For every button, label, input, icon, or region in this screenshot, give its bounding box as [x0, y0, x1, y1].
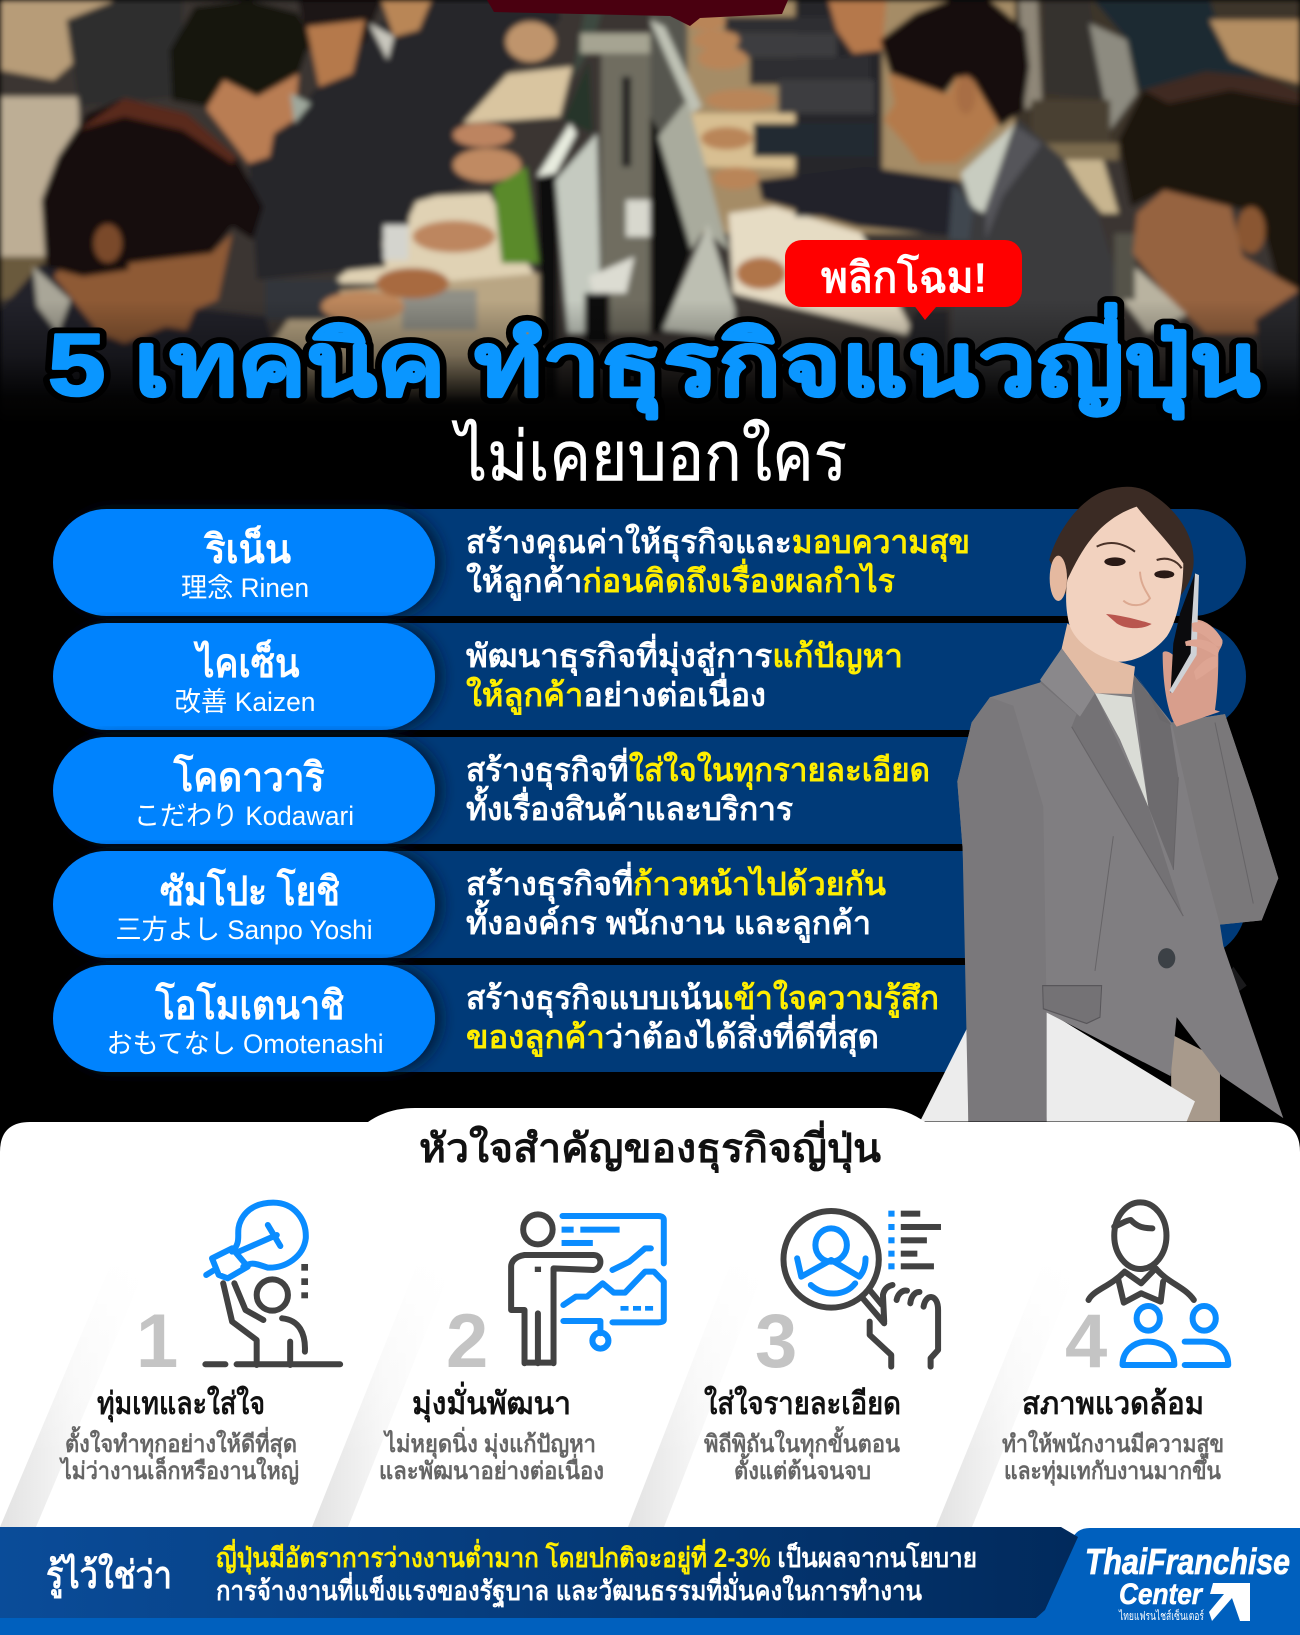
item 3: 3 [755, 1299, 797, 1384]
panel: Omotenashi row: สร้างธุรกิจแบบเน้นเข้าใจความรู้สึก [466, 979, 939, 1019]
item 4 [1002, 1202, 1228, 1487]
icon: manager and team [1089, 1202, 1228, 1365]
panel: Kaizen row: พัฒนาธุรกิจที่มุ่งสู่การ แก้ปัญหา [466, 633, 903, 677]
item 3: พิถีพิถันในทุกขั้นตอน [704, 1425, 901, 1460]
item 2: 2 [446, 1299, 488, 1384]
item 3: ใส่ใจรายละเอียด [704, 1385, 901, 1421]
icon: person holding light bulb [205, 1203, 340, 1365]
panel: Omotenashi row: โอโมเตนาชิ [155, 982, 344, 1028]
panel: Kaizen row [53, 623, 1246, 730]
panel: did you know: รู้ไว้ใช่ว่า [46, 1553, 172, 1599]
panel: Kaizen row: 改善 Kaizen [174, 687, 316, 717]
photo: businesswoman on the phone [920, 487, 1283, 1122]
panel: Sanpo Yoshi row: ซัมโปะ โยชิ [160, 868, 340, 914]
item 4: ทำให้พนักงานมีความสุข [1002, 1429, 1224, 1460]
panel: did you know [0, 1527, 1078, 1618]
panel: Sanpo Yoshi row: 三方よし Sanpo Yoshi [116, 915, 372, 945]
panel: Kaizen row: ไคเซ็น [193, 638, 300, 686]
logo: ThaiFranchise Center: ไทยแฟรนไชส์เซ็นเตอร์ [1118, 1608, 1204, 1623]
panel: Omotenashi row [53, 965, 1020, 1072]
item 1: ตั้งใจทำทุกอย่างให้ดีที่สุด [65, 1425, 297, 1460]
panel: Rinen row: ริเน็น [204, 524, 291, 572]
photo darkening gradient [0, 300, 1300, 445]
photo: office workers at desks [0, 0, 1300, 430]
dark red shape at top of the photo [487, 0, 788, 26]
subtitle: ไม่เคยบอกใคร [451, 418, 847, 495]
panel: Rinen row [53, 509, 1246, 616]
item 4: 4 [1065, 1299, 1107, 1384]
panel: Sanpo Yoshi row: ทั้งองค์กร พนักงาน และลูกค้า [466, 899, 871, 944]
panel: Kodawari row: ทั้งเรื่องสินค้าและบริการ [466, 785, 793, 827]
icon: arrow [1209, 1583, 1250, 1621]
item 1: ไม่ว่างานเล็กหรืองานใหญ่ [58, 1456, 299, 1485]
title: 5 เทคนิค ทำธุรกิจแนวญี่ปุ่น [48, 303, 1260, 420]
callout: red speech bubble [785, 240, 1022, 320]
item 1: ทุ่มเทและใส่ใจ [97, 1385, 265, 1423]
footer: blue base band and logo panel [0, 1528, 1300, 1635]
logo: ThaiFranchise Center: Center [1119, 1578, 1204, 1611]
item 1 [58, 1203, 340, 1485]
panel: Rinen row: 理念 Rinen [181, 573, 309, 603]
item 3 [704, 1211, 941, 1485]
panel: Kodawari row: สร้างธุรกิจที่ใส่ใจในทุกรายละเอียด [466, 747, 930, 791]
panel: Sanpo Yoshi row [53, 851, 1246, 958]
panel: Omotenashi row: ของลูกค้าว่าต้องได้สิ่งที่ดีที่สุด [466, 1014, 879, 1058]
item 2: มุ่งมั่นพัฒนา [412, 1381, 571, 1423]
panel: Sanpo Yoshi row: สร้างธุรกิจที่ก้าวหน้าไปด้วยกัน [466, 861, 886, 905]
item 2: และพัฒนาอย่างต่อเนื่อง [379, 1453, 604, 1485]
callout: red speech bubble: พลิกโฉม! [821, 253, 987, 301]
panel: Omotenashi row: おもてなし Omotenashi [106, 1029, 384, 1059]
panel: Rinen row: ให้ลูกค้าก่อนคิดถึงเรื่องผลกำไร [466, 558, 895, 602]
item 4: สภาพแวดล้อม [1022, 1386, 1204, 1421]
icon: presenter with chart [511, 1214, 664, 1363]
item 1: 1 [136, 1299, 178, 1384]
icon: magnifier on person [783, 1211, 941, 1367]
panel: did you know: การจ้างงานที่แข็งแรงของรัฐบาล และวัฒนธรรมที่มั่นคงในการทำงาน [216, 1571, 922, 1609]
panel: white bottom panel with tab [0, 1108, 1300, 1635]
panel: Kaizen row: ให้ลูกค้าอย่างต่อเนื่อง [466, 672, 766, 716]
panel: Kodawari row: こだわり Kodawari [134, 801, 354, 831]
item 4: และทุ่มเทกับงานมากขึ้น [1004, 1452, 1222, 1487]
panel: Kodawari row: โคดาวาริ [173, 754, 325, 800]
panel: did you know: ญี่ปุ่นมีอัตราการว่างงานต่ำมาก โดยปกติจะอยู่ที่ 2-3% เป็นผลจากนโยบาย [216, 1538, 977, 1575]
item 2 [379, 1214, 664, 1485]
title: 5 เทคนิค ทำธุรกิจแนวญี่ปุ่น [48, 303, 1260, 420]
logo: ThaiFranchise Center [1085, 1541, 1290, 1623]
item 3: ตั้งแต่ต้นจนจบ [734, 1452, 871, 1485]
panel: Rinen row: สร้างคุณค่าให้ธุรกิจและมอบความสุข [466, 523, 970, 563]
item 2: ไม่หยุดนิ่ง มุ่งแก้ปัญหา [382, 1426, 596, 1460]
panel: Kodawari row [53, 737, 1246, 844]
heading: core of Japanese business: หัวใจสำคัญของธุรกิจญี่ปุ่น [419, 1120, 881, 1174]
